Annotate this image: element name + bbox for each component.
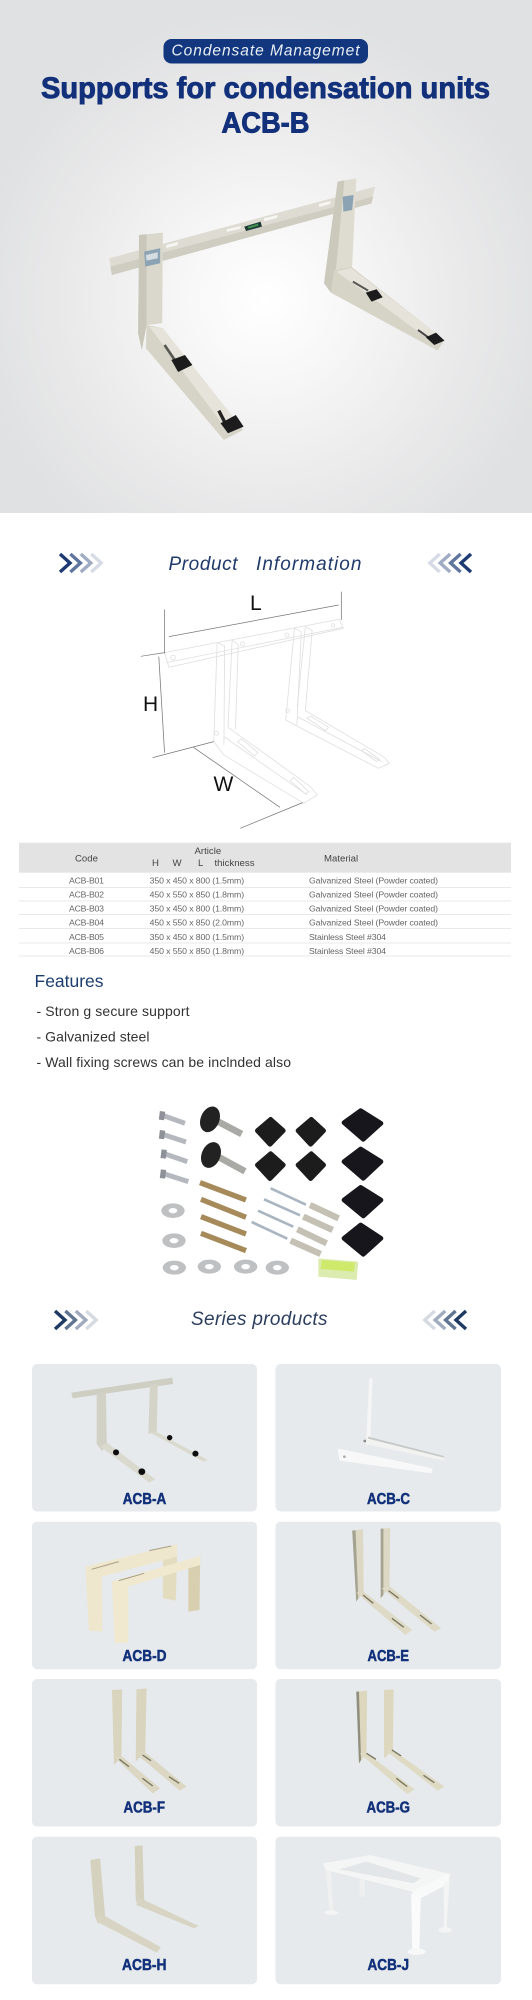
brass anchors xyxy=(200,1183,246,1251)
row ACB-B01: Galvanized Steel (Powder coated) xyxy=(309,875,438,885)
label: ACB-G xyxy=(366,1800,410,1816)
label: ACB-C xyxy=(367,1491,410,1508)
row ACB-B06: 450 x 550 x 850 (1.8mm) xyxy=(150,946,244,956)
heading text: Product xyxy=(168,554,238,575)
dimension label L: L xyxy=(250,592,262,615)
features list: - Galvanized steel xyxy=(36,1028,150,1044)
label: ACB-F xyxy=(124,1800,165,1816)
product photo: ACB-D xyxy=(86,1544,200,1643)
row ACB-B04: 450 x 550 x 850 (2.0mm) xyxy=(150,918,244,928)
row ACB-B03 xyxy=(69,903,438,913)
row ACB-B04 xyxy=(69,918,438,928)
card: ACB-D xyxy=(32,1522,257,1669)
table header xyxy=(19,843,511,873)
bubble level xyxy=(318,1258,358,1280)
table header: thickness xyxy=(214,858,255,869)
row ACB-B05: 350 x 450 x 800 (1.5mm) xyxy=(150,932,244,942)
category pill: Condensate Managemet xyxy=(172,42,360,60)
table header: H xyxy=(152,858,159,869)
wall plugs xyxy=(291,1205,339,1254)
features list xyxy=(36,1003,291,1070)
icon: right chevrons xyxy=(430,554,471,572)
product photo: ACB-J xyxy=(323,1855,452,1955)
icon: left chevrons xyxy=(55,1311,96,1329)
icon: left chevrons xyxy=(60,554,101,572)
table header: W xyxy=(172,858,182,869)
table header: L xyxy=(198,858,204,869)
row dividers xyxy=(19,888,511,956)
row ACB-B06 xyxy=(69,946,386,956)
dimension label H: H xyxy=(143,693,158,716)
row ACB-B01: ACB-B01 xyxy=(69,875,104,885)
row ACB-B06: Stainless Steel #304 xyxy=(309,946,386,956)
table header: Article xyxy=(194,846,221,857)
card: ACB-G xyxy=(276,1679,501,1826)
dimension label W: W xyxy=(214,773,234,796)
table: article specifications xyxy=(19,843,511,956)
row ACB-B01: 350 x 450 x 800 (1.5mm) xyxy=(150,875,244,885)
icon: right chevrons xyxy=(425,1311,466,1329)
product photo: ACB-H xyxy=(90,1845,198,1953)
row ACB-B05: ACB-B05 xyxy=(69,932,104,942)
row ACB-B02: Galvanized Steel (Powder coated) xyxy=(309,889,438,899)
section heading: Product Information xyxy=(60,554,471,575)
row ACB-B03: 350 x 450 x 800 (1.8mm) xyxy=(150,903,244,913)
label: ACB-J xyxy=(368,1957,409,1974)
row ACB-B04: ACB-B04 xyxy=(69,918,104,928)
row ACB-B06: ACB-B06 xyxy=(69,946,104,956)
row ACB-B02 xyxy=(69,889,438,899)
dimension lines xyxy=(141,592,341,828)
card: ACB-E xyxy=(276,1522,501,1669)
thumb screws xyxy=(196,1103,245,1171)
small black nuts xyxy=(257,1119,324,1179)
card: ACB-F xyxy=(32,1679,257,1826)
row ACB-B05 xyxy=(69,932,386,942)
product photo: ACB-C xyxy=(338,1378,444,1473)
title xyxy=(41,72,490,140)
wood screws xyxy=(252,1188,306,1239)
large black pads xyxy=(344,1111,381,1254)
dimension diagram xyxy=(141,592,390,828)
product photo: ACB-A xyxy=(71,1378,208,1483)
panel: hero xyxy=(0,0,532,513)
title: Supports for condensation units xyxy=(41,72,490,105)
table header: Material xyxy=(324,854,358,864)
row ACB-B02: ACB-B02 xyxy=(69,889,104,899)
product photo: wall bracket ACB-B xyxy=(109,178,444,440)
table header: Code xyxy=(75,854,98,864)
card: ACB-C xyxy=(276,1364,501,1512)
row ACB-B01 xyxy=(69,875,438,885)
row ACB-B03: ACB-B03 xyxy=(69,903,104,913)
features heading: Features xyxy=(34,971,104,991)
heading text: Information xyxy=(256,554,362,575)
small bolts xyxy=(159,1115,188,1182)
washers xyxy=(161,1203,289,1275)
row ACB-B03: Galvanized Steel (Powder coated) xyxy=(309,903,438,913)
heading text: Series products xyxy=(191,1309,328,1330)
section heading: Series products xyxy=(55,1309,466,1330)
features list: - Wall fixing screws can be inclnded also xyxy=(36,1054,291,1070)
product photo: ACB-E xyxy=(352,1528,441,1635)
product photo: ACB-G xyxy=(356,1689,444,1794)
hero background xyxy=(0,0,532,513)
row ACB-B04: Galvanized Steel (Powder coated) xyxy=(309,918,438,928)
row ACB-B05: Stainless Steel #304 xyxy=(309,932,386,942)
card: ACB-A xyxy=(32,1364,257,1512)
card: ACB-J xyxy=(276,1837,501,1984)
accessories photo: fixing kit xyxy=(159,1103,381,1280)
product photo: ACB-F xyxy=(112,1688,187,1793)
bracket outline xyxy=(165,619,390,803)
label: ACB-A xyxy=(123,1491,166,1508)
label: ACB-D xyxy=(122,1648,166,1665)
title: ACB-B xyxy=(222,108,310,140)
row ACB-B02: 450 x 550 x 850 (1.8mm) xyxy=(150,889,244,899)
category pill xyxy=(164,39,368,64)
label: ACB-H xyxy=(122,1957,166,1974)
card: ACB-H xyxy=(32,1837,257,1984)
heading text xyxy=(168,554,362,575)
features list: - Stron g secure support xyxy=(36,1003,190,1019)
label: ACB-E xyxy=(368,1648,409,1665)
